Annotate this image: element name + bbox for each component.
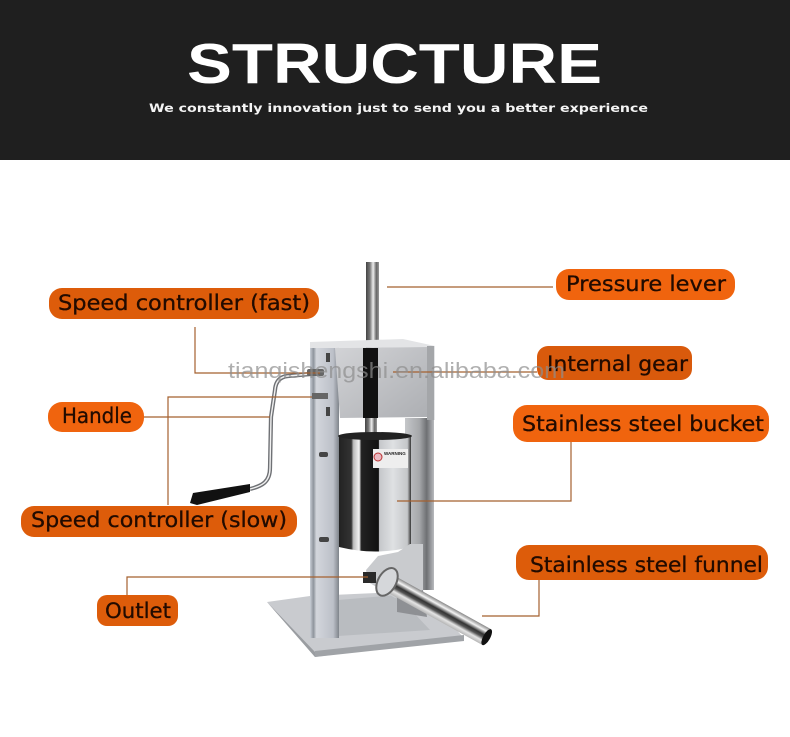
stainless steel bucket: WARNING <box>384 451 406 456</box>
crank highlight <box>250 373 322 489</box>
leader lines <box>127 287 571 616</box>
label: speed controller fast: Speed controller (fast) <box>58 291 310 315</box>
right post <box>405 418 434 590</box>
left post <box>310 342 339 638</box>
label: stainless steel bucket <box>513 405 769 442</box>
label: pressure lever: Pressure lever <box>566 272 726 296</box>
label: speed controller slow: Speed controller (slow) <box>31 508 287 532</box>
label: stainless steel bucket: Stainless steel bucket <box>522 412 764 436</box>
label: outlet <box>97 595 178 626</box>
label: outlet: Outlet <box>105 599 171 623</box>
lower right post <box>397 590 427 617</box>
watermark: tianqishengshi.en.alibaba.com <box>228 358 565 383</box>
label: speed controller fast <box>49 288 319 319</box>
label: stainless steel funnel <box>516 545 768 580</box>
outlet <box>363 544 423 598</box>
speed controller hubs <box>307 369 328 399</box>
stainless steel bucket <box>338 432 412 552</box>
pressure lever rod <box>366 262 379 350</box>
label: stainless steel funnel: Stainless steel funnel <box>530 553 763 577</box>
handle grip <box>190 484 250 505</box>
label: pressure lever <box>556 269 735 300</box>
label: handle <box>48 402 144 432</box>
title: STRUCTURE <box>187 32 602 96</box>
base plate <box>267 591 464 657</box>
subtitle: We constantly innovation just to send you a better experience <box>149 101 648 115</box>
label: internal gear <box>537 346 692 380</box>
machine illustration <box>190 262 497 657</box>
lower rod <box>365 417 377 435</box>
label: speed controller slow <box>21 506 297 537</box>
header band <box>0 0 790 160</box>
label: internal gear: Internal gear <box>547 352 688 376</box>
label: handle: Handle <box>62 404 132 428</box>
handle crank <box>250 373 322 489</box>
post bolts <box>319 353 330 542</box>
gear box <box>310 339 435 420</box>
stainless steel funnel <box>372 564 497 652</box>
